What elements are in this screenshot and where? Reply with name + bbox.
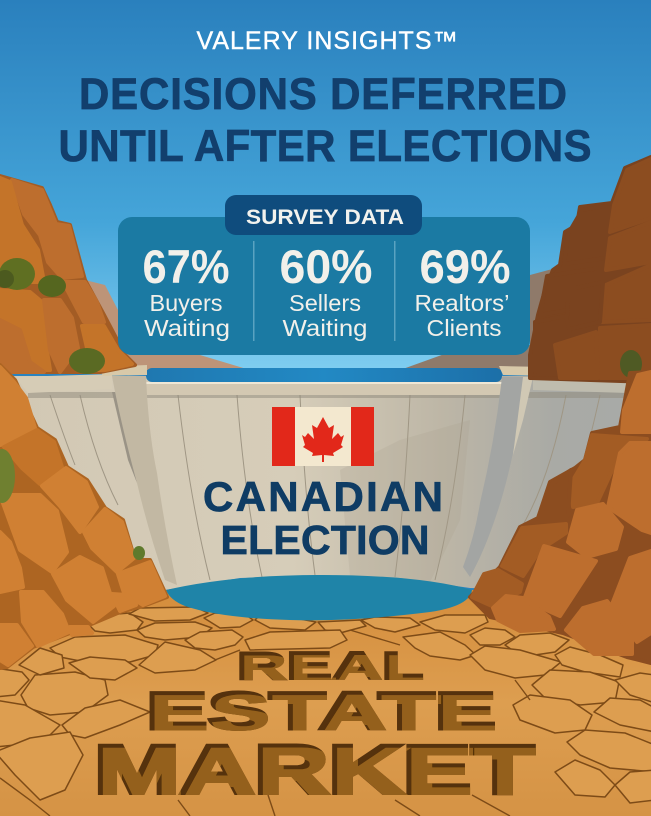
right dam pillar bbox=[463, 366, 547, 577]
bush: upper left second bbox=[38, 275, 66, 297]
dam text: Canadian Election bbox=[203, 473, 443, 563]
panel: survey data bbox=[118, 195, 530, 355]
stat: buyers waiting: 67% bbox=[142, 240, 230, 293]
title: UNTIL AFTER ELECTIONS bbox=[58, 122, 592, 171]
stat: sellers waiting: 60% bbox=[280, 240, 372, 293]
stat: realtors' clients: 69% bbox=[420, 240, 510, 293]
upper reservoir water bbox=[146, 368, 502, 382]
survey data tab: SURVEY DATA bbox=[246, 206, 404, 229]
rocks: lower right cliff bbox=[470, 372, 651, 663]
stat: sellers waiting: Sellers bbox=[289, 290, 361, 316]
title: DECISIONS DEFERRED bbox=[79, 70, 567, 119]
dam text: Canadian Election: CANADIAN bbox=[203, 473, 443, 520]
distant mountains bbox=[85, 268, 556, 370]
bottom reservoir water bbox=[166, 575, 472, 620]
bush: lower left bbox=[0, 449, 15, 503]
carved text: Real Estate Market: ESTATE bbox=[146, 682, 496, 741]
bush: upper right bbox=[620, 350, 642, 378]
title bbox=[58, 70, 592, 171]
flag of Canada bbox=[272, 407, 374, 466]
brand heading: VALERY INSIGHTS™ bbox=[196, 27, 458, 55]
carved text: Real Estate Market: MARKET bbox=[94, 731, 534, 808]
rocks: upper left cliff bbox=[0, 176, 135, 372]
stat: buyers waiting bbox=[142, 240, 230, 341]
stat: realtors' clients: Clients bbox=[426, 315, 502, 341]
stat: buyers waiting: Buyers bbox=[150, 290, 222, 316]
rocks: upper right cliff bbox=[530, 157, 651, 382]
stat: realtors' clients: Realtors’ bbox=[414, 290, 510, 316]
carved text: Real Estate Market bbox=[94, 645, 534, 808]
ground with cracked earth bbox=[0, 590, 651, 816]
stat: buyers waiting: Waiting bbox=[144, 315, 230, 341]
bush: upper left bbox=[0, 258, 35, 290]
sky background bbox=[0, 0, 651, 370]
left dam pillar bbox=[98, 365, 177, 585]
stat: sellers waiting bbox=[280, 240, 372, 341]
dam text: Canadian Election: ELECTION bbox=[220, 517, 430, 563]
bush: ledge bbox=[69, 348, 105, 374]
stat: sellers waiting: Waiting bbox=[282, 315, 368, 341]
bush: small lower left bbox=[133, 546, 145, 560]
dam wall bbox=[0, 376, 651, 600]
carved text: Real Estate Market: REAL bbox=[236, 645, 424, 688]
dam crest ledges bbox=[15, 374, 630, 395]
rocks: lower left cliff bbox=[0, 365, 167, 668]
icon: maple leaf bbox=[302, 417, 344, 462]
survey data tab bbox=[225, 195, 422, 235]
stat: realtors' clients bbox=[414, 240, 510, 341]
